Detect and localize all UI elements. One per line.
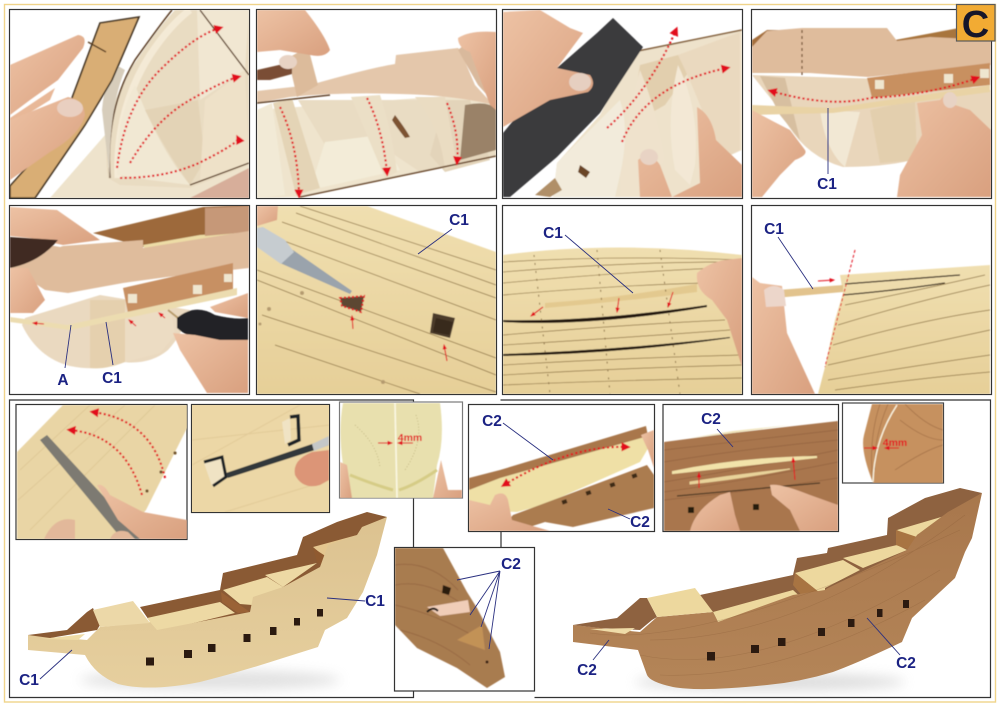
callouts: C2 — [577, 618, 916, 679]
small block and screw — [392, 115, 410, 138]
sheet strip — [10, 17, 139, 198]
callouts: C2: C2 — [501, 556, 521, 573]
panel: finished C2 planking frame — [414, 400, 990, 698]
callouts: A and C1 — [57, 322, 122, 389]
photo: clearing gun port with tool — [191, 404, 330, 513]
hull side sheet — [752, 28, 991, 77]
panel: sanding the first former — [10, 10, 250, 198]
icon: hand holding strip — [10, 35, 85, 115]
ship: planked in C1 — [19, 512, 387, 690]
ship hull — [28, 517, 387, 688]
panel: first strip C1 on hull — [752, 10, 992, 198]
callouts: C2: C2 — [482, 413, 502, 430]
gun ports — [146, 609, 323, 666]
icon: hands — [503, 10, 593, 127]
ship decks — [147, 535, 357, 632]
callouts: C2: C2 — [577, 662, 597, 679]
callout: C2 — [701, 411, 733, 447]
callout: C1: C1 — [764, 221, 784, 238]
ship hull — [573, 493, 982, 689]
arrows — [607, 30, 727, 142]
small arrow — [818, 280, 834, 281]
callout: C1 — [817, 108, 837, 193]
callout: C1: C1 — [817, 176, 837, 193]
panel: finished C1 planking frame — [10, 400, 414, 698]
icon: hand — [697, 258, 742, 367]
panel: cleaning gun ports — [256, 206, 496, 394]
panel: sanding with sandpaper — [502, 10, 742, 198]
callouts: C1: C1 — [19, 672, 39, 689]
forecastle deck — [93, 601, 150, 627]
arrows: edge lines — [280, 98, 458, 195]
callouts: A and C1: A — [57, 372, 69, 389]
lower fingers — [10, 268, 45, 313]
callouts: C2: C2 — [896, 655, 916, 672]
icon: hands — [469, 493, 550, 531]
arrow — [504, 447, 627, 485]
icon: fingers — [340, 462, 352, 498]
small arrows — [531, 292, 673, 316]
photo: applying C2 plank — [468, 404, 654, 532]
callouts: C2 — [482, 413, 650, 531]
measure: 4mm: 4mm — [398, 432, 422, 444]
photo: filing the hull — [16, 404, 187, 540]
arrow: strip direction — [771, 78, 977, 102]
panel: glued sheet over formers — [256, 10, 496, 198]
icon: hands pressing sheet — [257, 10, 330, 56]
icon: hand — [752, 277, 815, 394]
callout: C1 — [543, 225, 633, 293]
hull sheet — [10, 231, 249, 293]
gun ports — [707, 600, 909, 660]
icon: hands — [752, 110, 806, 197]
small arrows — [699, 458, 795, 488]
callout: C1 — [418, 212, 469, 254]
callouts: C1: C1 — [365, 593, 385, 610]
arrows: sanding direction — [117, 28, 238, 178]
icon: craft knife — [280, 250, 352, 294]
photo: bow of C2 plated hull — [394, 548, 534, 691]
badge: section C: C — [962, 4, 989, 46]
callouts: A and C1: C1 — [102, 370, 122, 387]
hull opening — [10, 237, 58, 268]
icon: tool — [226, 444, 314, 478]
forecastle deck — [647, 588, 713, 617]
panel: nailing strip along gunport line — [10, 205, 250, 394]
photo: filling C2 planks — [663, 404, 838, 532]
ship interior wall — [700, 488, 982, 622]
icon: hands and driver — [10, 207, 100, 245]
callouts: C1 — [19, 593, 385, 689]
photo: 4mm gap on C1 bow — [340, 402, 462, 498]
plank C1 — [752, 85, 990, 115]
callout: C2: C2 — [701, 411, 721, 428]
photo: 4mm gap on C2 bow — [842, 403, 944, 483]
plank C1 — [783, 284, 844, 298]
arrows — [70, 412, 165, 495]
callouts: C2 — [457, 556, 521, 649]
deck sheet — [257, 48, 496, 108]
ship decks — [713, 515, 948, 622]
measure: 4mm: 4mm — [883, 437, 907, 449]
small arrows — [352, 316, 447, 361]
icon: hands — [690, 492, 740, 531]
panel: trimming plank ends — [752, 206, 992, 394]
callout: C1 — [764, 221, 813, 289]
small arrows — [33, 313, 165, 326]
ship: planked in C2 — [573, 488, 982, 691]
icon: sandpaper — [503, 18, 643, 197]
callouts: C2: C2 — [630, 514, 650, 531]
plank strip — [10, 288, 237, 330]
ship interior wall — [140, 512, 387, 632]
callout: C1: C1 — [543, 225, 563, 242]
panel: fitting tapered plank — [502, 206, 742, 394]
callout: C1: C1 — [449, 212, 469, 229]
